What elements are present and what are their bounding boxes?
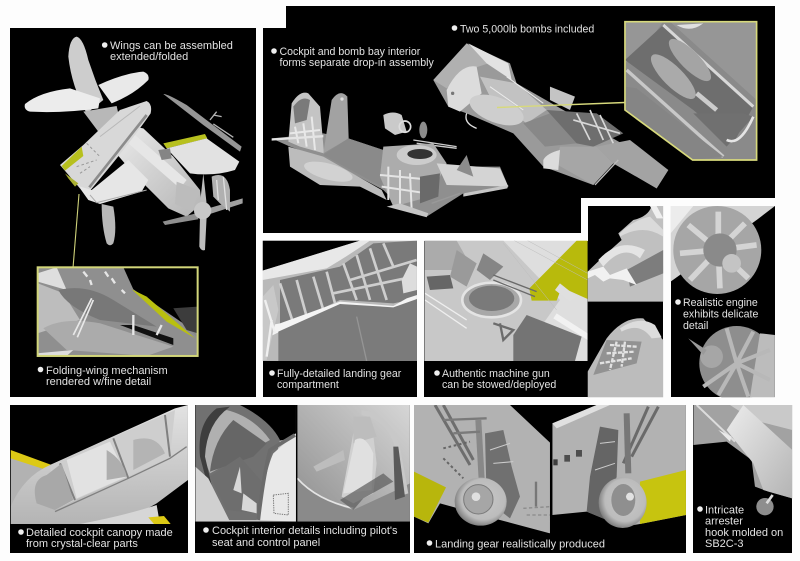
text: cockpit assembly feature: forms separate drop-in assembly bbox=[280, 57, 434, 69]
text: canopy feature bbox=[18, 527, 173, 550]
pilot seat render bbox=[297, 405, 410, 522]
text: machine gun feature bbox=[434, 368, 556, 391]
panel: engine parts close-ups bbox=[588, 206, 663, 397]
compartment render bbox=[263, 241, 417, 361]
text: landing gear compartment feature: compartment bbox=[277, 379, 339, 391]
bomb bay assembly bbox=[433, 43, 668, 188]
text: canopy feature: from crystal-clear parts bbox=[26, 538, 138, 550]
text: wings feature: Wings can be assembled bbox=[110, 40, 233, 52]
line to bomb inset bbox=[497, 102, 625, 108]
upper part render bbox=[588, 206, 663, 302]
text: cockpit assembly feature: Cockpit and bomb bay interior bbox=[280, 46, 421, 58]
text: engine feature bbox=[675, 297, 758, 332]
text: arrester hook feature: Intricate bbox=[705, 504, 744, 516]
text: engine feature: detail bbox=[683, 320, 708, 332]
panel: landing gear bbox=[414, 405, 686, 553]
text: arrester hook feature bbox=[697, 504, 783, 550]
text: cockpit interior feature: Cockpit interior details including pilot's bbox=[212, 525, 398, 537]
panel: arrester hook bbox=[693, 405, 792, 553]
lower engine render bbox=[699, 326, 774, 401]
text: folding wing feature bbox=[38, 365, 168, 388]
left landing gear render bbox=[414, 405, 550, 533]
machine gun render bbox=[424, 240, 588, 361]
text: landing gear compartment feature bbox=[269, 368, 402, 391]
panel: cockpit canopy bbox=[10, 405, 188, 553]
inset: bombs in bay bbox=[625, 22, 757, 160]
panel: landing gear compartment bbox=[263, 241, 417, 397]
text: wings feature bbox=[102, 40, 233, 63]
text: machine gun feature: can be stowed/deployed bbox=[442, 379, 556, 391]
text: cockpit assembly feature bbox=[271, 46, 434, 69]
text: canopy feature: Detailed cockpit canopy made bbox=[26, 527, 173, 539]
panel: cockpit interior bbox=[195, 405, 410, 553]
text: landing gear feature: Landing gear realistically produced bbox=[435, 538, 605, 550]
lower part render bbox=[588, 318, 663, 397]
text: landing gear compartment feature: Fully-detailed landing gear bbox=[277, 368, 402, 380]
text: bombs feature: Two 5,000lb bombs included bbox=[460, 24, 594, 36]
panel: wings overview bbox=[10, 28, 256, 397]
text: arrester hook feature: SB2C-3 bbox=[705, 538, 744, 550]
text: engine feature: exhibits delicate bbox=[683, 308, 758, 320]
text: folding wing feature: Folding-wing mechanism bbox=[46, 365, 168, 377]
leader line to wing inset bbox=[73, 194, 79, 268]
text: folding wing feature: rendered w/fine detail bbox=[46, 376, 151, 388]
control panel render bbox=[195, 405, 296, 522]
text: arrester hook feature: hook molded on bbox=[705, 527, 783, 539]
text: arrester hook feature: arrester bbox=[705, 516, 743, 528]
panel: engine bbox=[671, 206, 775, 401]
text: engine feature: Realistic engine bbox=[683, 297, 758, 309]
text: cockpit interior feature bbox=[203, 525, 398, 549]
aircraft with folded wings bbox=[25, 37, 243, 250]
text: machine gun feature: Authentic machine gun bbox=[442, 368, 550, 380]
canopy render bbox=[11, 405, 188, 524]
inset: folding wing mechanism bbox=[38, 267, 198, 356]
hook render bbox=[693, 405, 792, 498]
text: wings feature: extended/folded bbox=[110, 51, 188, 63]
panel: cockpit and bomb bay bbox=[263, 6, 775, 233]
panel: machine gun bbox=[424, 240, 588, 397]
upper engine render bbox=[671, 206, 775, 282]
text: cockpit interior feature: seat and control panel bbox=[212, 537, 320, 549]
right landing gear render bbox=[552, 405, 686, 527]
drop-in cockpit assembly bbox=[272, 93, 508, 217]
